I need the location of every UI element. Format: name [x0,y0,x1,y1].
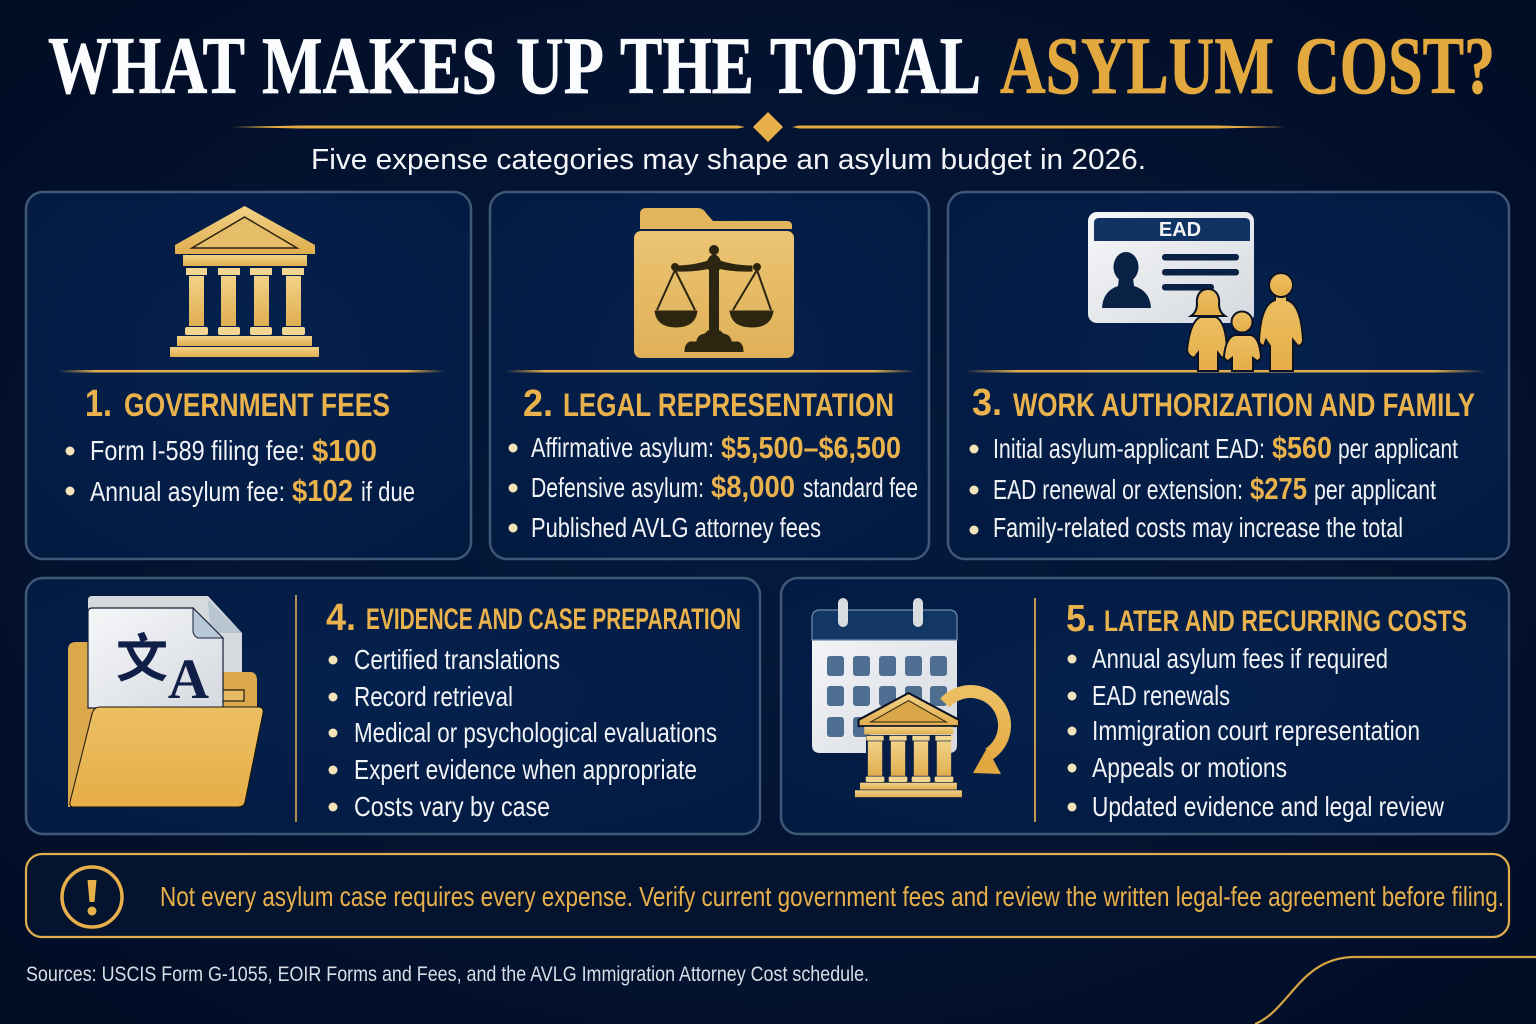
callout [26,854,1509,937]
bullet list: evidence and case preparation: Costs vary by case [354,791,550,822]
panel: government fees [26,192,471,559]
bullet list: legal representation: $8,000 [711,469,795,504]
bullet list: legal representation: Affirmative asylum: [531,432,714,463]
bullet list: evidence and case preparation [328,644,717,822]
heading: evidence and case preparation: 4. [326,597,356,639]
sources: Sources: USCIS Form G-1055, EOIR Forms and Fees, and the AVLG Immigration Attorney Cost schedule. [26,963,869,986]
heading: work authorization and family: 3. [972,382,1002,424]
bullet list: work authorization and family: Initial asylum-applicant EAD: [993,433,1265,464]
title: MAKES [262,20,497,111]
title: ASYLUM [1000,20,1274,111]
title: WHAT [48,20,245,111]
panel: evidence and case preparation [26,578,760,834]
icon: exclamation mark [62,867,122,927]
bullet list: work authorization and family: per applicant [1314,474,1436,505]
icon: EAD card with family [1088,212,1303,371]
bullet list: later and recurring costs: Updated evidence and legal review [1092,791,1445,822]
bullet list: later and recurring costs: Appeals or motions [1092,752,1287,783]
panel: later and recurring costs [781,578,1509,834]
heading: legal representation: 2. [523,383,553,425]
bullet list: work authorization and family: $560 [1272,430,1332,465]
bullet list: work authorization and family: EAD renewal or extension: [993,474,1243,505]
heading: legal representation [523,383,894,425]
heading: government fees: 1. [85,383,112,425]
heading: later and recurring costs [1066,598,1467,640]
bullet list: later and recurring costs: EAD renewals [1092,680,1230,711]
bullet list: evidence and case preparation: Record retrieval [354,681,513,712]
bullet list: work authorization and family [970,430,1458,543]
heading: evidence and case preparation [326,597,741,639]
icon: EAD card with family: EAD [1159,219,1201,241]
bullet list: evidence and case preparation: Certified translations [354,644,560,675]
bullet list: later and recurring costs: Annual asylum fees if required [1092,643,1388,674]
heading: government fees: GOVERNMENT FEES [124,387,390,423]
bullet list: work authorization and family: Family-related costs may increase the total [993,512,1403,543]
bullet list: legal representation: standard fee [803,472,918,503]
panel: work authorization and family [948,192,1509,559]
bullet list: government fees: $102 [292,473,353,508]
bullet list: government fees: if due [361,476,415,507]
icon: folder with translated documents [68,596,263,807]
icon: folder with translated documents: 文 [116,617,168,692]
panel: legal representation [490,192,929,559]
heading: legal representation: LEGAL REPRESENTATION [563,387,894,423]
bullet list: evidence and case preparation: Medical or psychological evaluations [354,717,717,748]
icon: calendar, building and return arrow [812,598,1005,797]
bullet list: government fees: $100 [312,433,377,468]
bullet list: work authorization and family: per applicant [1338,433,1458,464]
subtitle: Five expense categories may shape an asylum budget in 2026. [311,144,1146,176]
title: UP [516,20,604,111]
title [48,20,1495,111]
bullet list: legal representation: Defensive asylum: [531,472,704,503]
icon: folder with scales of justice [634,208,794,358]
heading: government fees [85,383,390,425]
bullet list: government fees: Form I-589 filing fee: [90,435,305,466]
bullet list: later and recurring costs [1068,643,1445,822]
icon: folder with translated documents: A [168,648,209,711]
icon: government building [170,206,319,357]
heading: later and recurring costs: 5. [1066,598,1096,640]
title: THE [620,20,754,111]
bullet list: government fees: Annual asylum fee: [90,476,285,507]
bullet list: legal representation [508,430,918,543]
bullet list: later and recurring costs: Immigration court representation [1092,715,1420,746]
bullet list: evidence and case preparation: Expert evidence when appropriate [354,754,697,785]
title: TOTAL [770,20,981,111]
bullet list: work authorization and family: $275 [1250,471,1307,506]
bullet list: government fees [66,433,415,508]
bullet list: legal representation: $5,500–$6,500 [721,430,901,465]
bullet list: legal representation: Published AVLG attorney fees [531,512,821,543]
title divider with diamond [232,112,1285,142]
heading: evidence and case preparation: EVIDENCE AND CASE PREPARATION [366,603,741,636]
